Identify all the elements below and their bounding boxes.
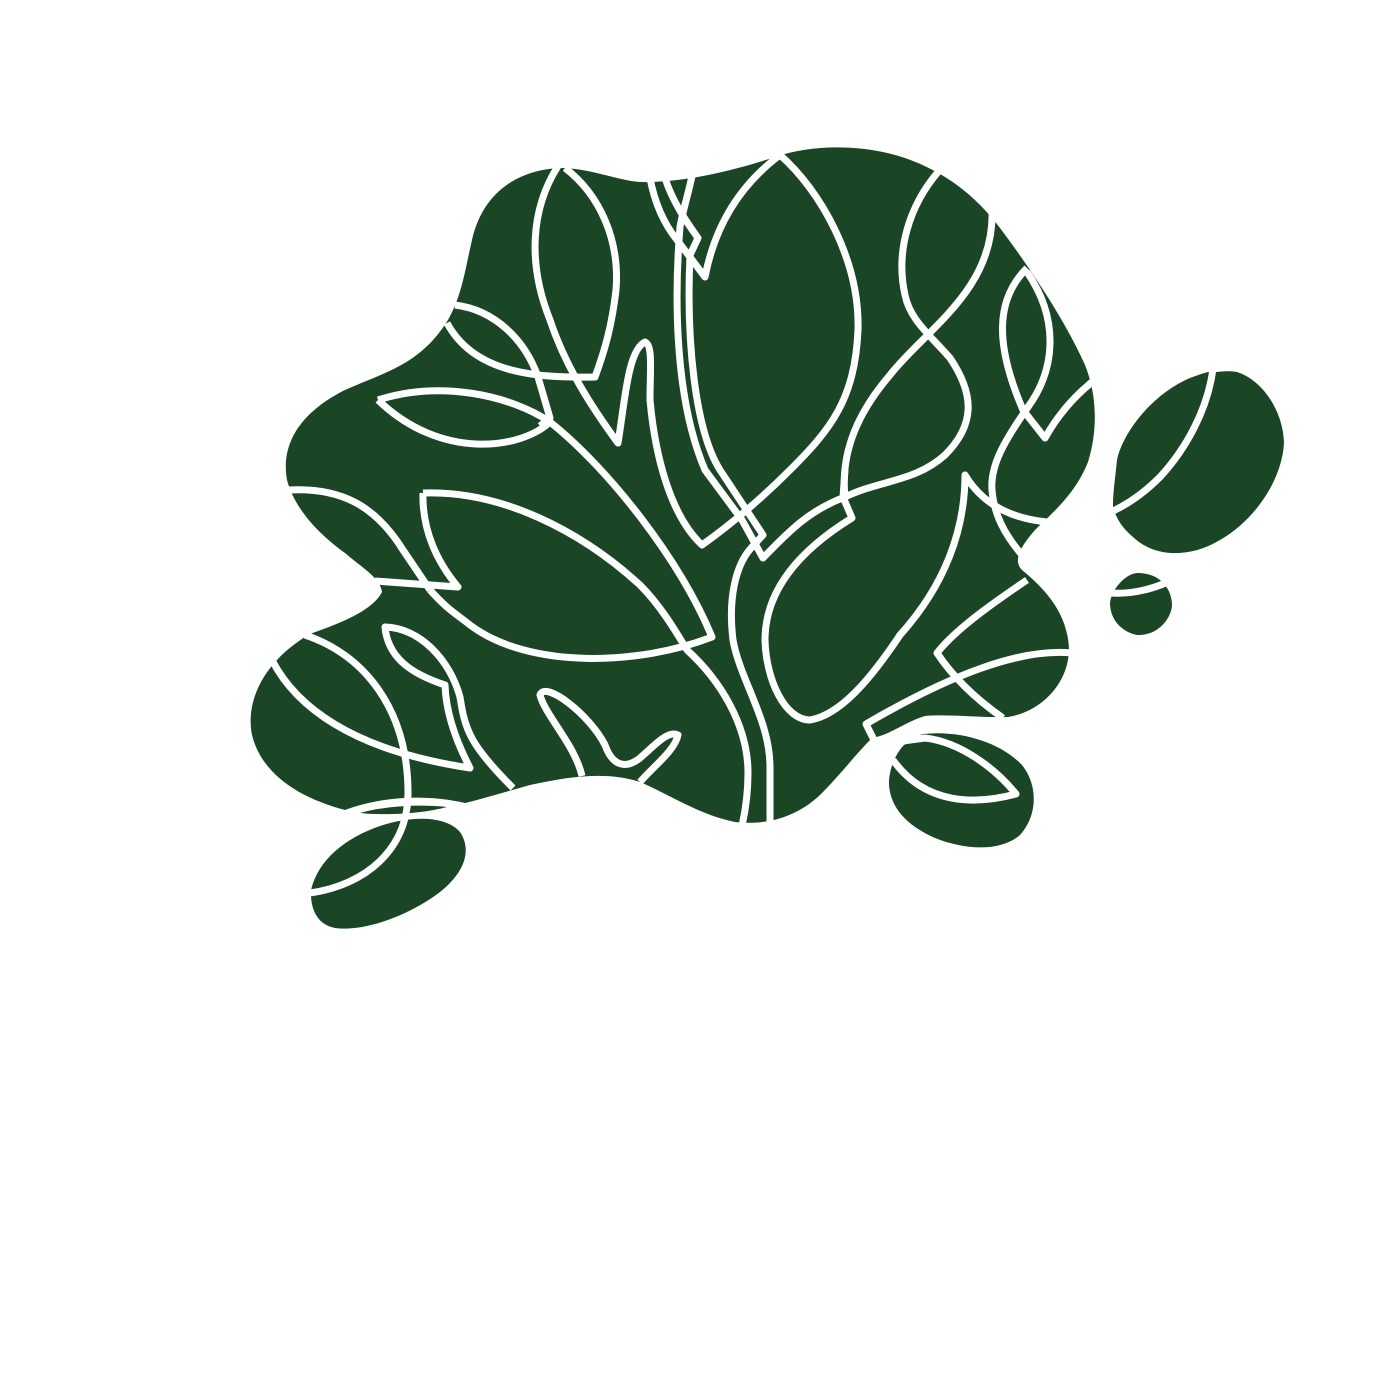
line: loop into bottom bean: [305, 635, 408, 893]
line: lower left leaf: [272, 627, 513, 788]
blob: lower left bean: [311, 819, 466, 929]
blob: small round: [1110, 573, 1172, 635]
line: big left leaf: [375, 493, 748, 826]
line: top leaf and left curl: [447, 168, 617, 426]
line: left upper leaf and long vein: [378, 391, 712, 658]
line: right bean arc: [1113, 368, 1213, 511]
line: right lower big leaf: [765, 470, 1047, 720]
line: stem strand to branch: [677, 172, 968, 558]
line: bottom right bean leaf: [893, 738, 1016, 800]
line: bottom sprout: [540, 691, 678, 782]
line: stem strand to trunk: [665, 178, 770, 826]
blob: main mass: [251, 147, 1095, 823]
blob: lower right bean: [889, 733, 1034, 847]
green blob shapes: [251, 147, 1284, 929]
blob: sliver under main mass: [360, 806, 447, 814]
blob: right bean: [1113, 371, 1284, 553]
white leaf line art: [272, 155, 1213, 893]
line: right side leaves: [992, 268, 1092, 555]
line: small round arc: [1110, 582, 1168, 593]
line: branch rising to upper right: [844, 210, 992, 497]
line: left edge leaf: [288, 490, 430, 590]
line: lower right leaf: [866, 580, 1072, 740]
line: central heart leaf: [535, 155, 858, 545]
